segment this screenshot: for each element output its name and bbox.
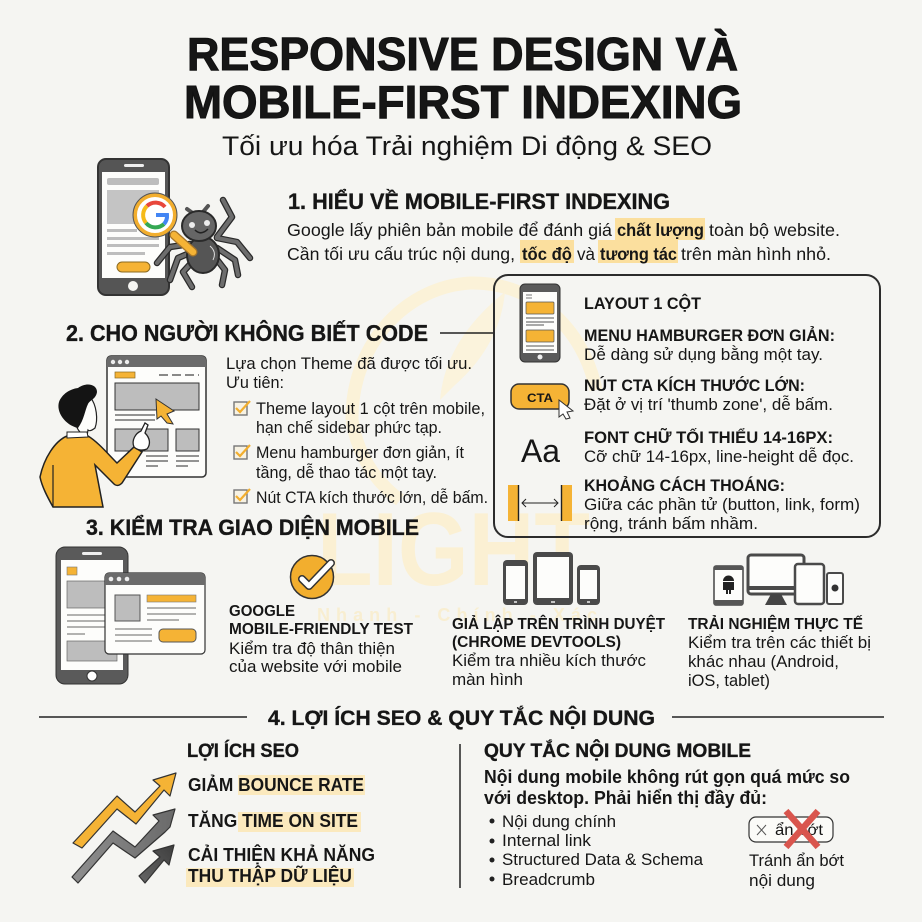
panel: mobile checklist	[494, 275, 880, 537]
watermark: Nhanh - Chính - Xác	[317, 605, 597, 625]
icon: growth arrows	[72, 773, 176, 883]
panel: SEO benefits: THU THẬP DỮ LIỆU	[188, 865, 352, 886]
panel: mobile content rules	[484, 740, 850, 890]
icon: person touching website	[40, 356, 206, 507]
text block: Google mobile-friendly test	[229, 603, 414, 676]
panel: mobile checklist: NÚT CTA KÍCH THƯỚC LỚN:	[584, 376, 805, 395]
heading: section 3: 3. KIỂM TRA GIAO DIỆN MOBILE	[86, 515, 419, 540]
icon: real devices	[714, 555, 843, 605]
panel: mobile checklist: LAYOUT 1 CỘT	[584, 294, 701, 313]
text block: real experience	[688, 615, 871, 690]
icon: three devices	[503, 552, 600, 605]
watermark: LIGHT	[317, 492, 590, 608]
section 1: tốc độ	[522, 244, 572, 264]
title: RESPONSIVE DESIGN VÀ	[187, 28, 738, 80]
checklist item 1: Theme layout 1 cột trên mobile,	[256, 400, 485, 418]
heading: section 2: 2. CHO NGƯỜI KHÔNG BIẾT CODE	[66, 319, 428, 346]
icon: spacing arrows	[508, 485, 572, 521]
section 1	[287, 189, 840, 264]
section 1: toàn bộ website.	[709, 220, 840, 240]
watermark	[317, 283, 597, 625]
panel: SEO benefits: CẢI THIỆN KHẢ NĂNG	[188, 844, 375, 865]
list: required content: Nội dung chính	[502, 813, 616, 831]
list: required content: Structured Data & Schema	[502, 851, 704, 869]
text block: section 2 intro and checklist	[226, 355, 488, 507]
text block: browser emulation: màn hình	[452, 671, 523, 689]
title	[184, 28, 742, 128]
heading: section 4: 4. LỢI ÍCH SEO & QUY TẮC NỘI DUNG	[268, 705, 655, 730]
checklist item 1	[234, 400, 485, 437]
section 1: và	[577, 244, 595, 264]
section 1: Cần tối ưu cấu trúc nội dung,	[287, 244, 515, 264]
panel: mobile checklist: KHOẢNG CÁCH THOÁNG:	[584, 476, 785, 495]
icon: check badge	[290, 556, 334, 598]
panel: mobile content rules: nội dung	[749, 872, 815, 890]
panel: mobile content rules: QUY TẮC NỘI DUNG MOBILE	[484, 740, 751, 762]
checklist item 2: Menu hamburger đơn giản, ít	[256, 444, 464, 462]
checklist item 2: tầng, dễ thao tác một tay.	[256, 463, 437, 482]
title: MOBILE-FIRST INDEXING	[184, 76, 742, 128]
panel: SEO benefits: LỢI ÍCH SEO	[187, 740, 299, 762]
icon: phone and browser	[56, 547, 205, 684]
panel: mobile checklist: Giữa các phần tử (button, link, form)	[584, 496, 860, 514]
text block: real experience: TRẢI NGHIỆM THỰC TẾ	[688, 615, 863, 633]
icon: CTA button	[511, 384, 573, 419]
heading: section 1: 1. HIỂU VỀ MOBILE-FIRST INDEXING	[288, 189, 670, 214]
text block: real experience: Kiểm tra trên các thiết bị	[688, 634, 871, 652]
icon: CTA button: CTA	[527, 393, 553, 405]
text block: Google mobile-friendly test: của website với mobile	[229, 658, 402, 676]
panel: mobile checklist: Dễ dàng sử dụng bằng một tay.	[584, 345, 823, 364]
panel: mobile content rules: Nội dung mobile không rút gọn quá mức so	[484, 767, 850, 787]
checklist item 3: Nút CTA kích thước lớn, dễ bấm.	[256, 488, 488, 507]
text block: Google mobile-friendly test: Kiểm tra độ thân thiện	[229, 640, 395, 658]
panel: SEO benefits: GIẢM BOUNCE RATE	[188, 774, 364, 795]
icon: phone with Google magnifier and spider	[98, 159, 250, 295]
panel: SEO benefits: TĂNG TIME ON SITE	[188, 810, 358, 831]
panel: mobile checklist: FONT CHỮ TỐI THIỂU 14-16PX:	[584, 427, 833, 447]
subtitle: Tối ưu hóa Trải nghiệm Di động & SEO	[222, 131, 712, 161]
text block: browser emulation: (CHROME DEVTOOLS)	[452, 634, 621, 651]
list: required content: Breadcrumb	[502, 871, 595, 889]
text block: Google mobile-friendly test: MOBILE-FRIENDLY TEST	[229, 621, 414, 638]
panel: mobile content rules: với desktop. Phải hiển thị đầy đủ:	[484, 788, 767, 808]
checklist item 1: hạn chế sidebar phức tạp.	[256, 419, 442, 437]
list: required content	[490, 813, 704, 889]
icon: crossed hidden content: ẩn bớt	[775, 821, 824, 839]
section 1: trên màn hình nhỏ.	[681, 244, 831, 264]
panel: mobile checklist: rộng, tránh bấm nhầm.	[584, 515, 758, 533]
icon: font sample: Aa	[521, 433, 560, 469]
icon: crossed hidden content	[749, 811, 833, 847]
section 1: tương tác	[600, 244, 677, 264]
text block: section 2 intro and checklist: Lựa chọn Theme đã được tối ưu.	[226, 355, 472, 373]
text block: real experience: iOS, tablet)	[688, 672, 770, 690]
panel: mobile checklist: Cỡ chữ 14-16px, line-height dễ đọc.	[584, 447, 854, 466]
list: required content: Internal link	[502, 832, 592, 850]
panel: mobile checklist: Đặt ở vị trí 'thumb zone', dễ bấm.	[584, 395, 833, 414]
icon: one column phone	[520, 284, 560, 362]
panel: SEO benefits	[186, 740, 375, 887]
text block: real experience: khác nhau (Android,	[688, 653, 839, 671]
text block: browser emulation: GIẢ LẬP TRÊN TRÌNH DUYỆT	[452, 615, 666, 633]
panel: mobile checklist: MENU HAMBURGER ĐƠN GIẢN:	[584, 326, 835, 345]
text block: section 2 intro and checklist: Ưu tiên:	[226, 374, 284, 392]
text block: browser emulation: Kiểm tra nhiều kích thước	[452, 652, 646, 670]
text block: browser emulation	[452, 615, 666, 689]
panel: mobile content rules: Tránh ẩn bớt	[749, 852, 844, 870]
text block: Google mobile-friendly test: GOOGLE	[229, 603, 295, 620]
checklist item 2	[234, 444, 464, 482]
section 1: chất lượng	[617, 220, 704, 240]
section 1: Google lấy phiên bản mobile để đánh giá	[287, 220, 612, 240]
